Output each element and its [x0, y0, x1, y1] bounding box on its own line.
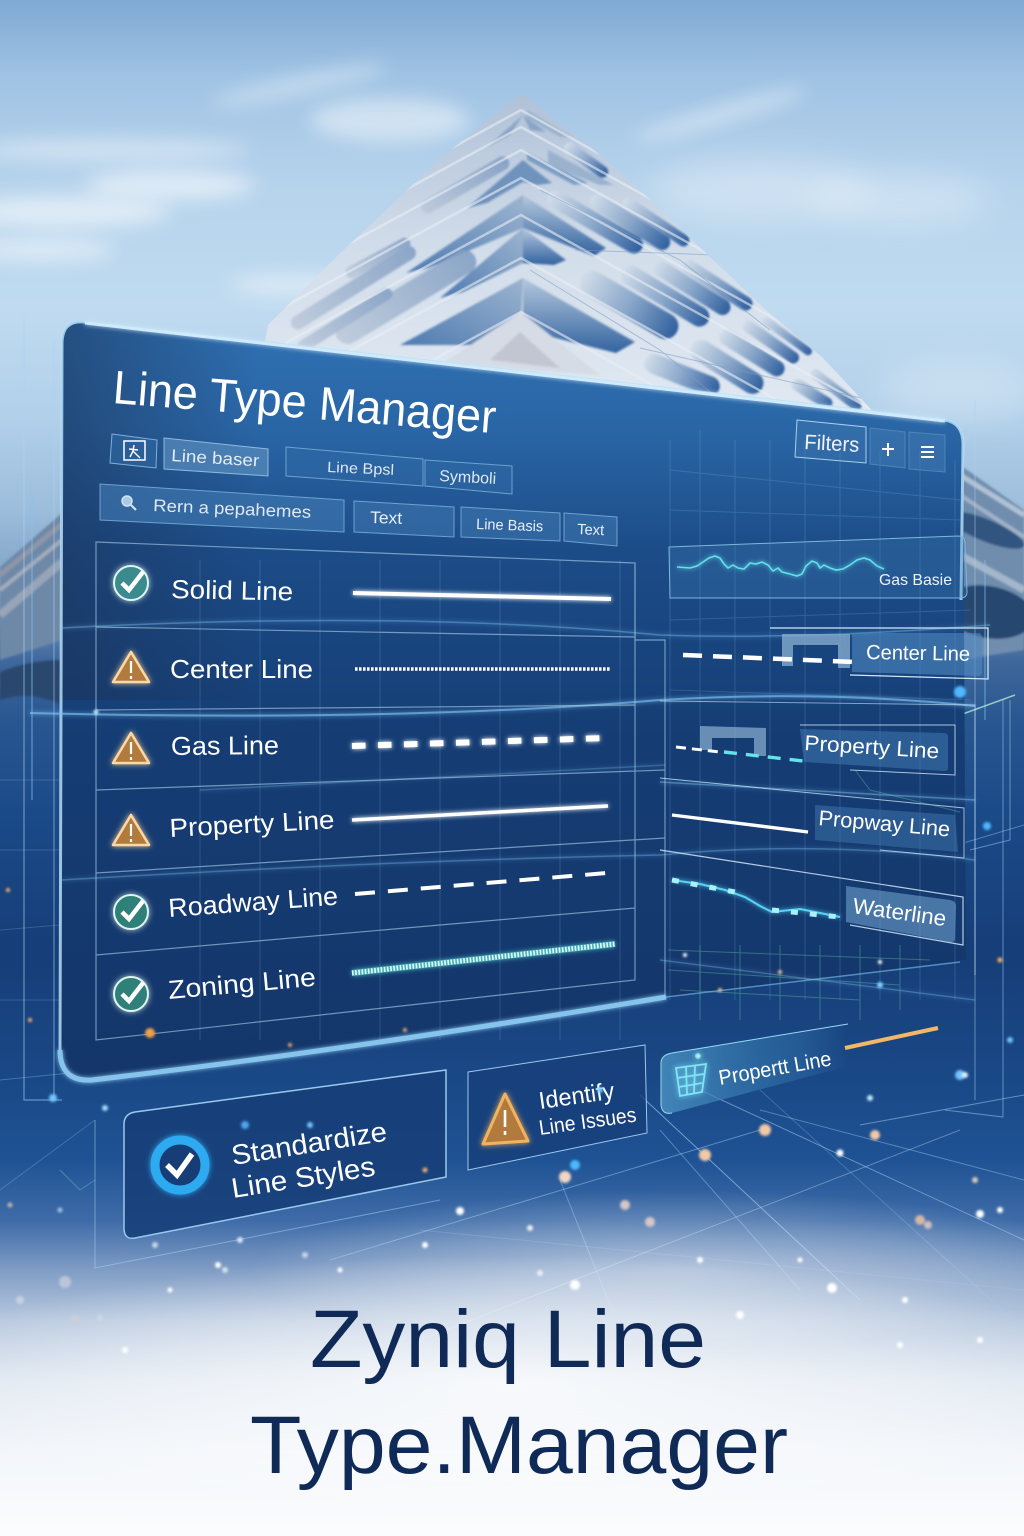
bottom feature cards [124, 1024, 938, 1238]
row: Gas Line: Gas Line [171, 730, 279, 761]
left wing [0, 513, 62, 705]
row: Solid Line [114, 566, 611, 607]
tab: Line baser [164, 438, 268, 476]
right side preview: Property Line [660, 701, 975, 975]
panel light streaks [30, 620, 990, 1000]
row: Gas Line [113, 730, 607, 763]
main title: Type.Manager [250, 1400, 788, 1491]
right side preview: Center Line: Center Line [866, 641, 970, 666]
building: ridge openings [400, 110, 635, 375]
white fog behind title [0, 1255, 1024, 1515]
card: Propertt Line [661, 1024, 938, 1113]
panel body [60, 322, 966, 1081]
building: openings [288, 110, 864, 413]
card: Standardize Line Styles: Line Styles [229, 1151, 377, 1204]
row: Roadway Line [114, 873, 607, 929]
right side preview: Propway Line [660, 778, 964, 858]
panel title: Line Type Manager [111, 360, 498, 443]
row: Zoning Line [114, 944, 615, 1011]
building: window pills left [288, 154, 512, 354]
card: Identify Line Issues [468, 1045, 647, 1170]
right side preview: Property Line: Property Line [804, 731, 940, 763]
icon: warning [483, 1094, 528, 1144]
panel bottom glow edge [60, 997, 666, 1080]
search field [100, 484, 344, 532]
right side preview: Gas Basie [669, 536, 967, 598]
icon: check [114, 977, 148, 1011]
icon: check [114, 566, 148, 600]
right side preview: Center Line [683, 628, 988, 679]
mist lower right [250, 1190, 1024, 1350]
right side preview: Waterline [660, 850, 963, 945]
row: Property Line [113, 804, 608, 845]
button: plus [870, 428, 905, 468]
card: Standardize Line Styles [124, 1070, 446, 1238]
right wing [938, 465, 1024, 660]
building: floor seams [530, 190, 870, 400]
icon: warning [113, 815, 149, 845]
icon: warning [113, 652, 149, 682]
main title [250, 1294, 788, 1491]
toolbar right buttons [795, 420, 945, 472]
table frame [96, 542, 665, 1040]
icon: blue check badge [155, 1140, 205, 1190]
right side preview: Gas Basie: Gas Basie [879, 572, 952, 589]
panel border [60, 322, 963, 1056]
panel grid texture [200, 430, 970, 1040]
row: Center Line: Center Line [170, 654, 313, 684]
building: window pills right [544, 140, 864, 413]
icon: person tab [110, 434, 157, 468]
icon: magnifier [122, 496, 136, 510]
right side preview: Propway Line: Propway Line [818, 806, 951, 841]
toolbar row 1 [110, 434, 512, 494]
row: Zoning Line: Zoning Line [167, 962, 317, 1005]
card: Identify Line Issues: Identify [537, 1078, 616, 1115]
field: Text: Text [370, 508, 403, 528]
field: Text small: Text [577, 521, 605, 539]
light particles [6, 686, 1013, 1353]
field: Line Basis: Line Basis [476, 516, 543, 535]
green data grid [668, 770, 960, 1020]
icon: warning [113, 733, 149, 763]
icon: basket [676, 1054, 706, 1096]
building: floor plates [287, 108, 864, 406]
row: Roadway Line: Roadway Line [167, 881, 339, 923]
tab: Line Bpsl [286, 447, 423, 486]
field: Text [354, 501, 454, 537]
tab: Line baser: Line baser [171, 446, 260, 470]
building tower [265, 93, 872, 410]
card: Identify Line Issues: Line Issues [537, 1104, 638, 1140]
card: Standardize Line Styles: Standardize [229, 1116, 389, 1171]
row: Property Line: Property Line [169, 804, 335, 843]
row: Solid Line: Solid Line [171, 574, 293, 607]
button: menu [909, 432, 945, 472]
toolbar row 2 [100, 484, 617, 546]
orange line [845, 1028, 938, 1048]
tab: Symboli [425, 460, 512, 494]
button: Filters [795, 420, 866, 463]
field: Line Basis [461, 507, 560, 541]
panel top edge highlight [85, 323, 945, 421]
tab: Line Bpsl: Line Bpsl [327, 459, 395, 479]
search field: Rern a pepahemes [153, 496, 312, 522]
row: Center Line [113, 652, 611, 684]
icon: check [114, 895, 148, 929]
main title: Zyniq Line [310, 1294, 706, 1385]
panel left shade [60, 322, 966, 700]
lower building wings [0, 465, 1024, 705]
right side preview: Waterline: Waterline [851, 893, 948, 931]
main glass panel [30, 322, 990, 1081]
tab: Symboli: Symboli [439, 468, 497, 488]
line type table [96, 542, 665, 1040]
field: Text small [564, 513, 617, 546]
card: Propertt Line: Propertt Line [717, 1047, 833, 1090]
background frames and wires [0, 315, 1024, 1340]
clouds [0, 57, 1024, 420]
button: Filters: Filters [804, 431, 860, 457]
